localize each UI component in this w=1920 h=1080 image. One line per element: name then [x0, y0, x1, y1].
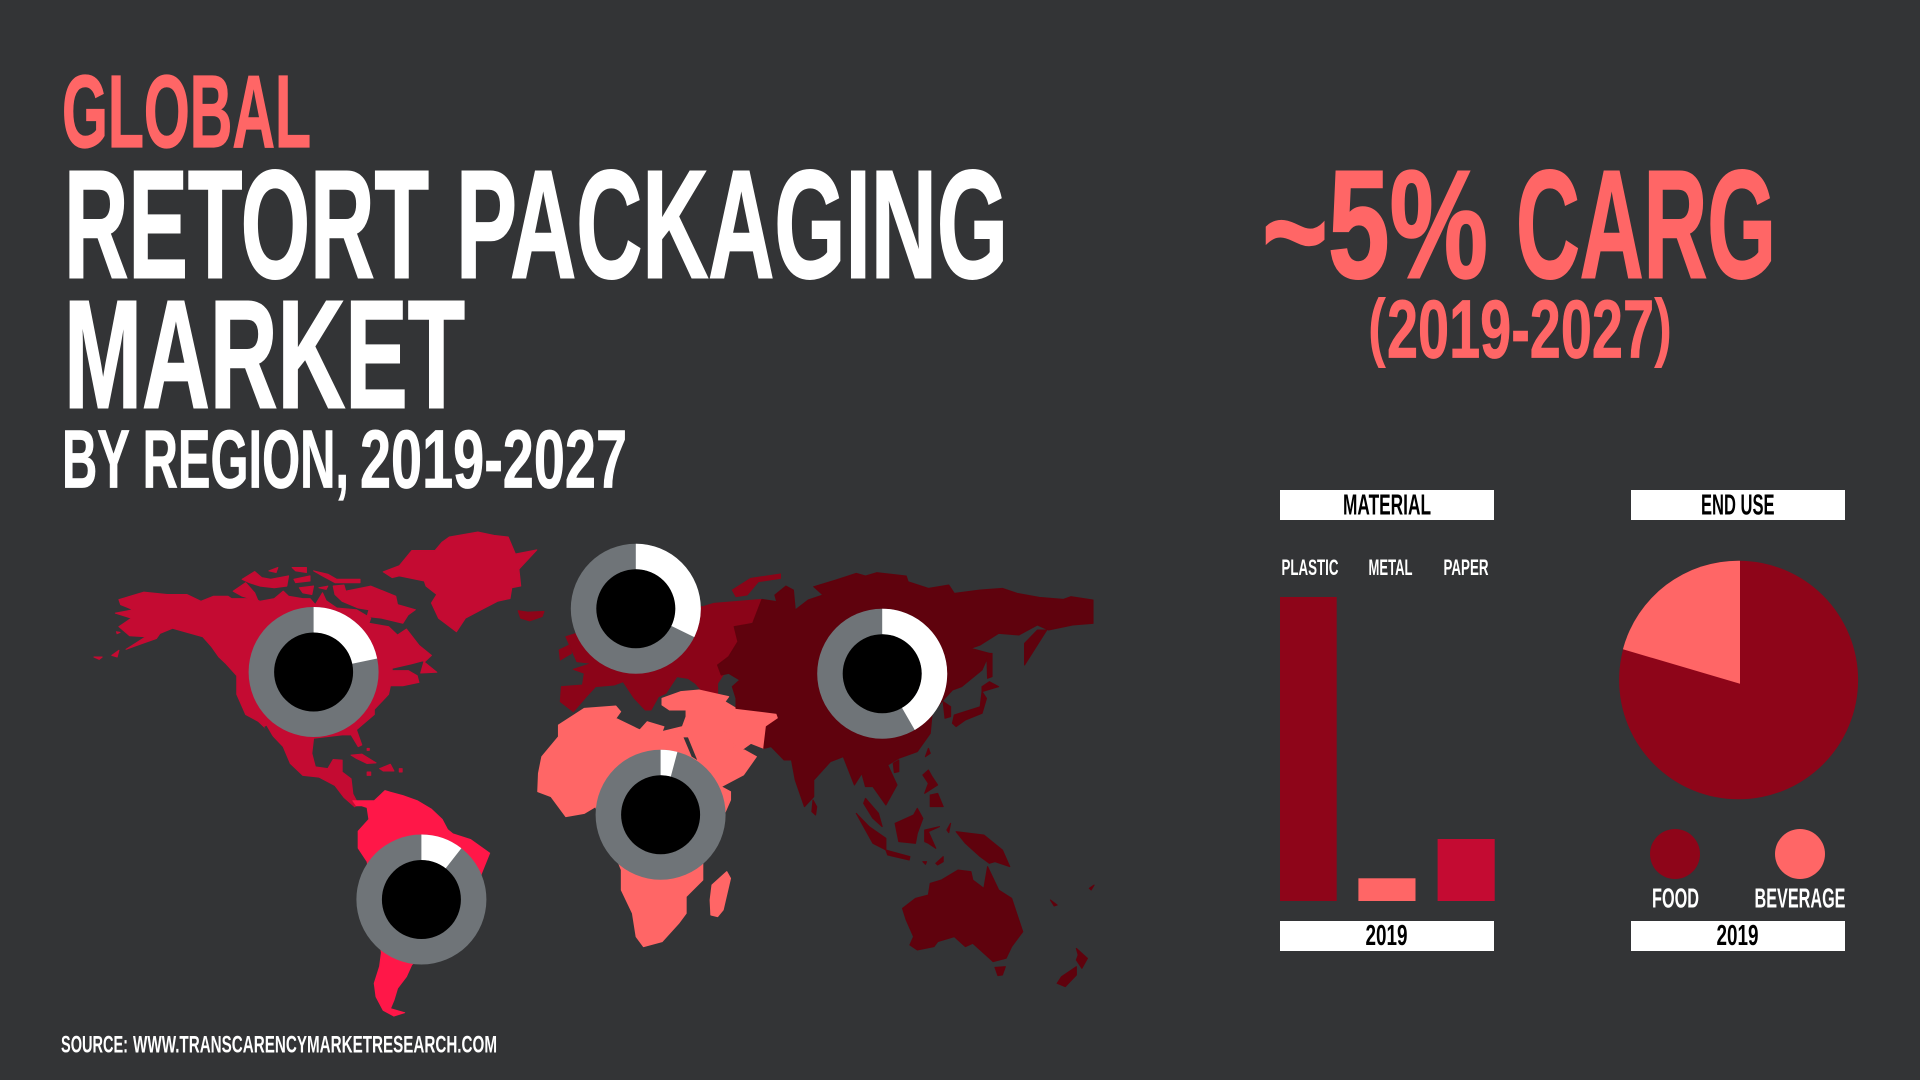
- donut: North America: [249, 607, 379, 737]
- material year: [1280, 920, 1494, 952]
- end use year: [1631, 920, 1845, 952]
- title block: [62, 54, 1008, 506]
- material header: [1280, 490, 1494, 522]
- heading: market: MARKET: [64, 268, 465, 440]
- CAGR period: [1368, 282, 1672, 376]
- label: metal: METAL: [1368, 555, 1412, 580]
- legend: food: [1650, 829, 1700, 914]
- donut: Asia Pacific: [817, 609, 947, 739]
- CAGR period: ): [1654, 284, 1672, 369]
- heading: retort packaging: PACKAGING: [456, 138, 1008, 310]
- legend: beverage: BEVERAGE: [1754, 882, 1846, 914]
- map: Iceland: [518, 611, 544, 621]
- subheading: by region: BY REGION,: [62, 412, 349, 506]
- source note: WWW.TRANSCARENCYMARKETRESEARCH.COM: [133, 1032, 497, 1058]
- CAGR value: 5%: [1328, 138, 1488, 310]
- donut: Europe: [571, 544, 701, 674]
- end use header: END USE: [1701, 490, 1774, 522]
- map: Asia and Oceania: [718, 573, 1094, 987]
- bar: metal: [1358, 878, 1416, 901]
- subheading: by region: 2019-2027: [360, 412, 627, 506]
- bar: paper: [1438, 839, 1495, 901]
- map: North America: [94, 567, 437, 807]
- CAGR value: ~: [1262, 145, 1328, 317]
- end use header: [1631, 490, 1845, 522]
- legend: beverage: [1754, 829, 1846, 914]
- material year: 2019: [1366, 920, 1408, 952]
- heading: global: GLOBAL: [62, 54, 311, 169]
- map: Greenland: [383, 532, 537, 632]
- bar: plastic: [1280, 597, 1337, 901]
- CAGR callout: [1262, 138, 1776, 376]
- label: paper: PAPER: [1444, 555, 1489, 580]
- map: Africa and Middle East: [538, 690, 779, 947]
- heading: retort packaging: RETORT: [64, 138, 429, 310]
- material header: MATERIAL: [1343, 490, 1431, 522]
- heading: retort packaging: [64, 138, 1008, 310]
- donut: South America: [356, 834, 486, 964]
- source note: SOURCE:: [61, 1032, 128, 1058]
- label: plastic: PLASTIC: [1282, 555, 1339, 580]
- end use year: 2019: [1716, 920, 1758, 952]
- CAGR period: (: [1368, 284, 1386, 369]
- map: South America: [353, 791, 490, 1016]
- panel: material: [1280, 490, 1495, 952]
- map: Europe: [559, 574, 780, 712]
- legend: food: FOOD: [1652, 882, 1699, 914]
- CAGR value: [1262, 138, 1776, 317]
- donut: Middle East and Africa: [596, 750, 726, 880]
- CAGR period: 2019-2027: [1387, 282, 1654, 376]
- pie chart: [1619, 561, 1858, 799]
- world map: [94, 532, 1094, 1016]
- source note: [61, 1032, 497, 1058]
- panel: end use: [1619, 490, 1858, 952]
